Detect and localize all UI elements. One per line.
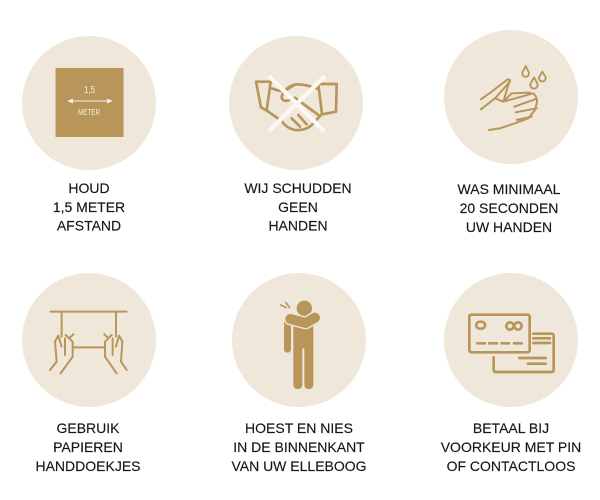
panel: pay by card <box>441 273 581 474</box>
panel: keep 1.5 meter distance <box>22 36 156 234</box>
background circle <box>444 273 578 407</box>
panel: cough in elbow <box>231 273 367 474</box>
label: was minimaal: WAS MINIMAAL <box>458 181 561 197</box>
icon: crossed handshake <box>256 76 337 131</box>
label: gebruik papieren handdoekjes: PAPIEREN <box>53 439 123 455</box>
icon: hands holding towel <box>50 312 127 373</box>
label: hoest en nies: HOEST EN NIES <box>245 420 353 436</box>
label: gebruik papieren handdoekjes: GEBRUIK <box>56 420 120 436</box>
body and legs <box>293 322 313 389</box>
label: houd afstand: AFSTAND <box>57 218 121 234</box>
label: betaal bij voorkeur: OF CONTACTLOOS <box>447 458 575 474</box>
icon: 1.5 meter square <box>56 68 124 137</box>
label: was minimaal: UW HANDEN <box>466 219 552 235</box>
hanging arm <box>284 322 291 353</box>
label: hoest en nies: VAN UW ELLEBOOG <box>231 458 367 474</box>
label: hoest en nies: IN DE BINNENKANT <box>233 439 365 455</box>
icon: bank cards <box>469 315 554 372</box>
icon: 1.5 meter square: 1,5 <box>84 85 95 96</box>
label: houd afstand: 1,5 METER <box>53 199 125 215</box>
icon: 1.5 meter square: METER <box>78 108 100 117</box>
panel: wash hands <box>444 30 578 235</box>
label: wij schudden geen handen: HANDEN <box>268 218 328 234</box>
background circle <box>22 273 156 407</box>
raised arm with outline <box>290 318 315 323</box>
white cross <box>269 76 325 131</box>
label: wij schudden geen handen: WIJ SCHUDDEN <box>244 180 352 196</box>
background circle <box>232 273 366 407</box>
icon: washing hands with drops <box>481 66 546 130</box>
label: houd afstand: HOUD <box>68 180 110 196</box>
icon: person coughing into elbow <box>281 301 315 389</box>
label: betaal bij voorkeur: BETAAL BIJ <box>473 420 549 436</box>
water drops <box>522 66 546 89</box>
background circle <box>229 36 363 170</box>
label: was minimaal: 20 SECONDEN <box>460 200 558 216</box>
label: betaal bij voorkeur: VOORKEUR MET PIN <box>441 439 581 455</box>
label: wij schudden geen handen: GEEN <box>278 199 318 215</box>
panel: paper towels <box>22 273 156 474</box>
background circle <box>22 36 156 170</box>
label: gebruik papieren handdoekjes: HANDDOEKJES <box>35 458 141 474</box>
background circle <box>444 30 578 164</box>
panel: no handshakes <box>229 36 363 234</box>
